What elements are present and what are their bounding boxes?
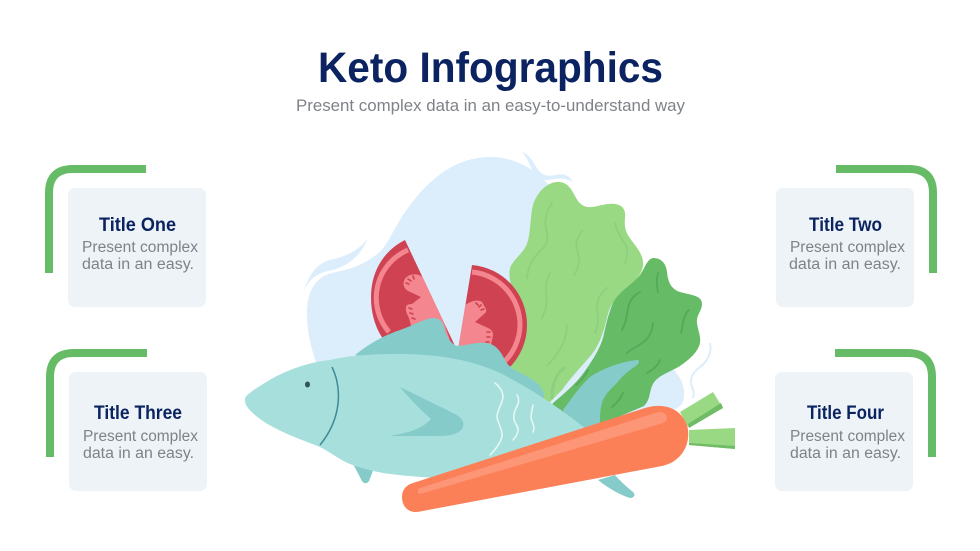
heading: title one: Title One xyxy=(99,215,176,236)
panel: title four xyxy=(775,353,932,491)
text: title one body xyxy=(82,239,198,273)
text: title three body: data in an easy. xyxy=(83,445,194,462)
text: title four body: Present complex xyxy=(790,428,905,445)
carrot highlight xyxy=(418,412,667,494)
background blob xyxy=(303,152,711,440)
fish fins and tail xyxy=(351,318,639,498)
carrot xyxy=(402,392,735,512)
panel: title two xyxy=(776,169,933,307)
fish pectoral fin xyxy=(390,387,463,436)
text: title two body xyxy=(789,239,905,273)
text: title four body: data in an easy. xyxy=(790,445,901,462)
lettuce: dark leaf xyxy=(545,258,702,424)
tomato: left slice xyxy=(371,240,455,346)
text: title one body: data in an easy. xyxy=(82,256,194,273)
text: title three body xyxy=(83,428,198,462)
tomato: right slice xyxy=(458,265,527,369)
fish eye xyxy=(305,382,310,388)
carrot stems xyxy=(680,392,735,449)
heading: title four: Title Four xyxy=(807,403,885,424)
carrot body xyxy=(402,406,688,512)
fish xyxy=(245,318,639,498)
title: Keto Infographics xyxy=(318,44,663,92)
text: title two body: data in an easy. xyxy=(789,256,901,273)
subtitle: Present complex data in an easy-to-understand way xyxy=(296,96,685,115)
panel: title three xyxy=(50,353,207,491)
fish scales xyxy=(490,383,534,455)
fish body xyxy=(245,354,600,478)
heading: title two: Title Two xyxy=(809,215,882,236)
text: title four body xyxy=(790,428,905,462)
fish gill xyxy=(320,367,338,445)
text: title two body: Present complex xyxy=(790,239,905,256)
lettuce: light leaf xyxy=(500,182,643,412)
text: title one body: Present complex xyxy=(82,239,198,256)
illustration: keto food xyxy=(245,152,735,512)
panel: title one xyxy=(49,169,206,307)
heading: title three: Title Three xyxy=(94,403,182,424)
text: title three body: Present complex xyxy=(83,428,198,445)
